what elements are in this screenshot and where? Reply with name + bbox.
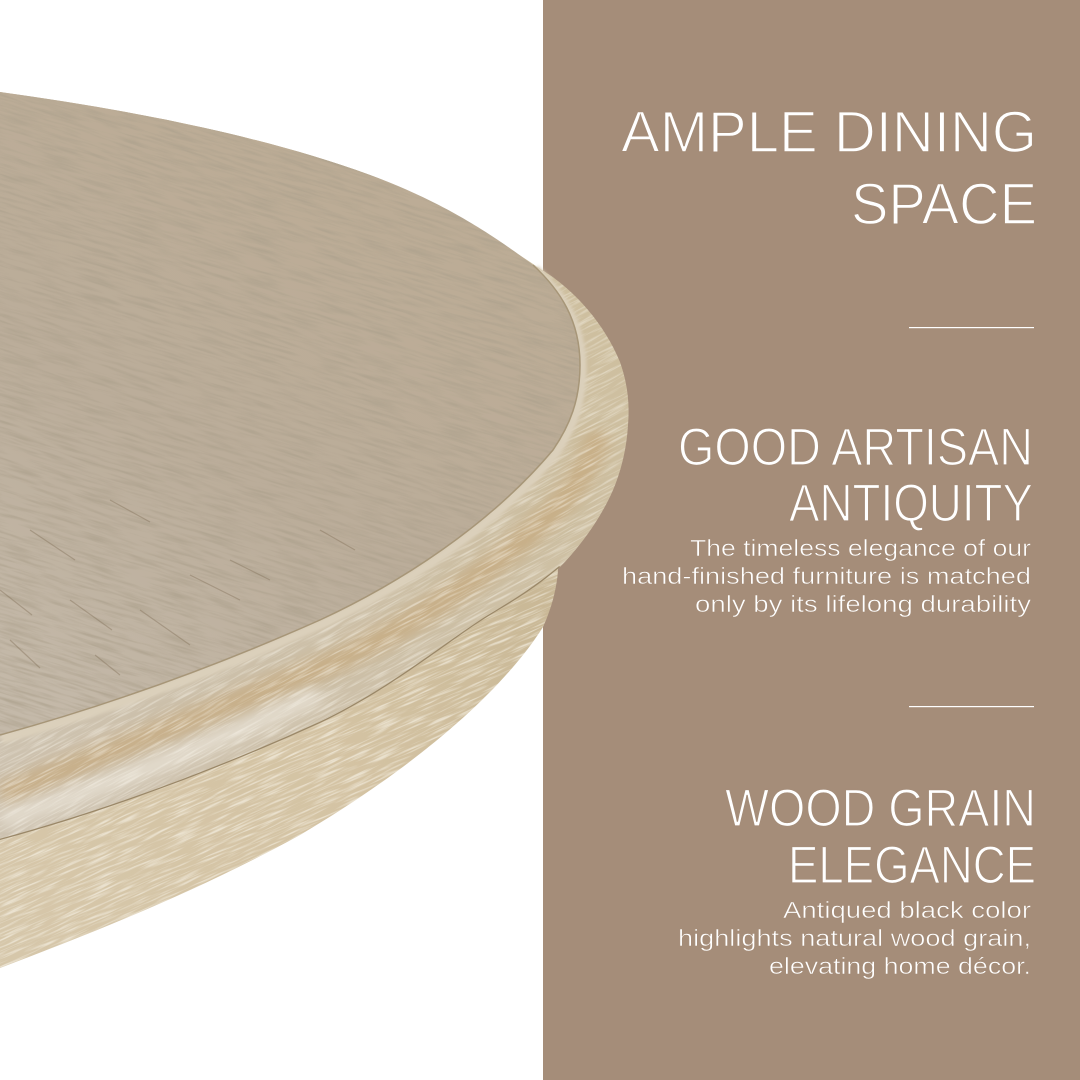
subheading: ELEGANCE — [788, 836, 1036, 895]
body text: elevating home décor. — [769, 953, 1031, 979]
divider — [909, 327, 1034, 328]
subheading: WOOD GRAIN — [725, 779, 1036, 838]
panel: brown text column — [543, 0, 1080, 1080]
table top surface lip — [2, 269, 582, 739]
body text: highlights natural wood grain, — [678, 925, 1031, 951]
heading: ample dining space: AMPLE DINING — [621, 100, 1037, 165]
section: wood grain elegance — [678, 779, 1036, 979]
body text: The timeless elegance of our — [690, 535, 1031, 561]
subheading: ANTIQUITY — [789, 474, 1033, 533]
subheading — [678, 418, 1033, 533]
body text — [678, 897, 1031, 979]
table apron — [0, 568, 558, 968]
section: good artisan antiquity — [622, 418, 1033, 617]
photo: round wooden table top — [0, 50, 640, 980]
heading: ample dining space: SPACE — [851, 172, 1037, 237]
body text — [622, 535, 1032, 617]
subheading — [725, 779, 1036, 895]
body text: only by its lifelong durability — [695, 591, 1032, 617]
dark grain streaks — [0, 500, 355, 675]
table top surface — [0, 92, 580, 734]
table rim — [0, 92, 629, 840]
subheading: GOOD ARTISAN — [678, 418, 1033, 477]
body text: hand-finished furniture is matched — [622, 563, 1031, 589]
heading: ample dining space — [621, 100, 1037, 237]
body text: Antiqued black color — [783, 897, 1031, 923]
divider — [909, 706, 1034, 707]
